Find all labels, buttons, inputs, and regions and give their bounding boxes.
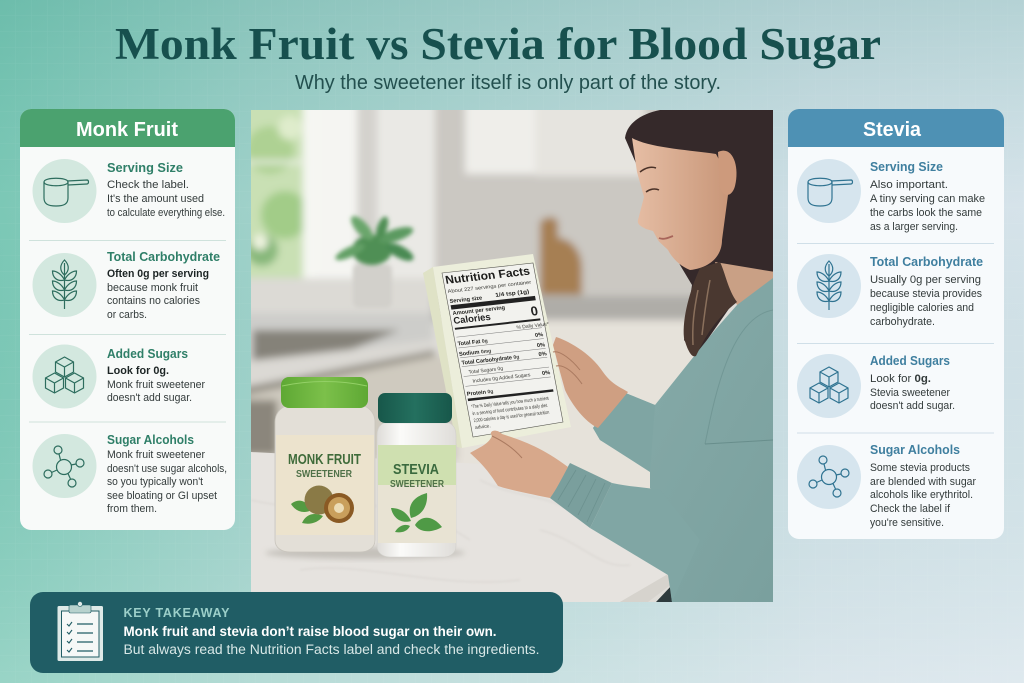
- nutrition facts box: *The % Daily Value tells you how much a nutrient: [471, 396, 550, 410]
- nutrition facts box: About 227 servings per container: [447, 280, 532, 295]
- sugar alcohols row: [32, 433, 227, 515]
- jar: stevia sweetener: SWEETENER: [390, 479, 445, 490]
- total carbohydrate row: Total Carbohydrate: [870, 255, 983, 269]
- sugar alcohols row: are blended with sugar: [870, 476, 976, 488]
- nutrition facts box: Serving size: [449, 295, 483, 305]
- sugar alcohols row: Check the label if: [870, 503, 951, 515]
- jar: stevia sweetener: STEVIA: [393, 461, 439, 478]
- serving size row: A tiny serving can make: [870, 193, 985, 205]
- nutrition facts box: Includes 0g Added Sugars: [472, 372, 532, 385]
- plant pot: [353, 264, 392, 308]
- nutrition facts box: Protein 0g: [466, 389, 494, 398]
- sugar alcohols row: from them.: [107, 503, 157, 515]
- added sugars row: doesn't add sugar.: [107, 392, 192, 404]
- added sugars row: [797, 354, 955, 418]
- nutrition facts box: in a serving of food contributes to a daily diet.: [472, 403, 549, 417]
- serving size row: [797, 159, 985, 233]
- callout: key takeaway: But always read the Nutrition Facts label and check the ingredients.: [124, 642, 540, 657]
- serving size row: [32, 159, 225, 223]
- added sugars row: Look for 0g.: [870, 373, 931, 385]
- sugar alcohols row: so you typically won't: [107, 476, 203, 488]
- nutrition facts box: Calories: [453, 312, 492, 327]
- kitchen background: [251, 110, 737, 602]
- icon: clipboard checklist: [58, 602, 103, 661]
- sugar alcohols row: you're sensitive.: [870, 517, 944, 529]
- icon: stevia leaves: [391, 493, 442, 532]
- total carbohydrate row: negligible calories and: [870, 302, 974, 314]
- jar shadows: [265, 547, 465, 559]
- serving size row: as a larger serving.: [870, 221, 958, 233]
- added sugars row: Added Sugars: [107, 347, 188, 361]
- nutrition facts box: 1/4 tsp (1g): [495, 289, 530, 299]
- nutrition facts box: Nutrition Facts: [444, 266, 531, 287]
- serving size row: to calculate everything else.: [107, 207, 225, 219]
- total carbohydrate row: carbohydrate.: [870, 316, 935, 328]
- total carbohydrate row: because monk fruit: [107, 282, 198, 294]
- photo: woman reading nutrition label: [240, 100, 785, 610]
- jar: monk fruit sweetener: [275, 377, 375, 552]
- serving size row: Serving Size: [870, 160, 943, 174]
- panel: monk fruit: [20, 109, 235, 530]
- jar: stevia sweetener: [377, 393, 456, 557]
- nutrition facts box: Amount per serving: [452, 305, 506, 317]
- added sugars row: [32, 344, 205, 408]
- subtitle: Why the sweetener itself is only part of the story.: [295, 71, 721, 94]
- nutrition facts box: Sodium 0mg: [459, 348, 492, 358]
- nutrition facts box: 0%: [538, 351, 547, 358]
- sugar alcohols row: Monk fruit sweetener: [107, 449, 205, 461]
- title: Monk Fruit vs Stevia for Blood Sugar: [115, 19, 881, 69]
- nutrition facts box: % Daily Value*: [516, 321, 550, 331]
- callout: key takeaway: [30, 592, 563, 673]
- total carbohydrate row: or carbs.: [107, 309, 147, 321]
- nutrition facts box: 0%: [537, 342, 546, 349]
- callout: key takeaway: Monk fruit and stevia don’t raise blood sugar on their own.: [124, 624, 496, 639]
- jar: monk fruit sweetener: MONK FRUIT: [288, 452, 361, 468]
- total carbohydrate row: Often 0g per serving: [107, 268, 209, 280]
- serving size row: the carbs look the same: [870, 207, 982, 219]
- sugar alcohols row: Sugar Alcohols: [870, 443, 960, 457]
- sugar alcohols row: Some stevia products: [870, 462, 970, 474]
- jar: monk fruit sweetener: SWEETENER: [296, 469, 353, 480]
- serving size row: Serving Size: [107, 161, 183, 175]
- sugar alcohols row: alcohols like erythritol.: [870, 489, 973, 501]
- marble countertop: [251, 452, 672, 602]
- nutrition facts box: Total Sugars 0g: [468, 366, 504, 376]
- serving size row: Also important.: [870, 179, 948, 191]
- nutrition facts box: 2,000 calories a day is used for general nutrition: [473, 410, 550, 424]
- total carbohydrate row: Usually 0g per serving: [870, 274, 981, 286]
- nutrition facts box: Total Carbohydrate 0g: [461, 354, 520, 367]
- nutrition facts box: Total Fat 0g: [457, 338, 488, 348]
- nutrition facts box: 0%: [535, 332, 544, 339]
- total carbohydrate row: [797, 254, 983, 328]
- sugar alcohols row: see bloating or GI upset: [107, 490, 217, 502]
- monk fruit header: Monk Fruit: [76, 119, 178, 141]
- woman: [550, 107, 780, 602]
- stevia header: Stevia: [863, 119, 922, 141]
- serving size row: It's the amount used: [107, 193, 204, 205]
- added sugars row: Stevia sweetener: [870, 387, 950, 399]
- nutrition facts box: 0%: [542, 370, 551, 377]
- sugar alcohols row: [797, 443, 976, 529]
- added sugars row: doesn't add sugar.: [870, 400, 955, 412]
- nutrition facts box: [423, 254, 571, 448]
- total carbohydrate row: contains no calories: [107, 295, 200, 307]
- added sugars row: Monk fruit sweetener: [107, 379, 205, 391]
- sugar alcohols row: doesn't use sugar alcohols,: [107, 463, 227, 475]
- stevia header: [788, 109, 1004, 147]
- hands: [470, 337, 628, 498]
- monk fruit header: [20, 109, 235, 147]
- callout: key takeaway: KEY TAKEAWAY: [124, 606, 230, 620]
- plant: [333, 213, 416, 265]
- sugar alcohols row: Sugar Alcohols: [107, 433, 194, 447]
- nutrition facts box: 0: [529, 303, 539, 319]
- icon: monk fruit: [291, 486, 354, 524]
- serving size row: Check the label.: [107, 179, 189, 191]
- added sugars row: Look for 0g.: [107, 365, 169, 377]
- total carbohydrate row: because stevia provides: [870, 288, 982, 300]
- total carbohydrate row: Total Carbohydrate: [107, 250, 220, 264]
- nutrition facts box: advice.: [475, 423, 491, 431]
- added sugars row: Added Sugars: [870, 354, 950, 368]
- panel: stevia: [788, 109, 1004, 539]
- total carbohydrate row: [32, 250, 220, 321]
